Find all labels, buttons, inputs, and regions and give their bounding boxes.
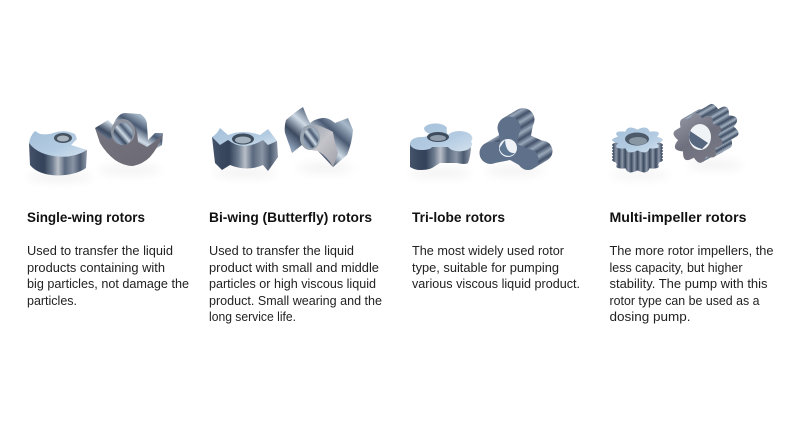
text block: single-wing description: products containing with [27, 261, 165, 275]
text block: bi-wing description [209, 244, 382, 324]
text block: bi-wing description: long service life. [209, 310, 296, 324]
icon: multi-impeller rotors [610, 100, 743, 179]
text block: single-wing description [27, 244, 189, 308]
icon: tri-lobe rotors [408, 108, 552, 178]
heading: bi-wing rotors: Bi-wing (Butterfly) rotors [209, 209, 372, 225]
heading: tri-lobe rotors: Tri-lobe rotors [412, 209, 505, 225]
text block: multi-impeller description: The more rotor impellers, the [610, 244, 774, 258]
icon: bi-wing butterfly rotors [212, 107, 353, 178]
text block: single-wing description: big particles, not damage the [27, 277, 189, 291]
text block: bi-wing description: product with small and middle [209, 261, 379, 275]
text block: multi-impeller description [610, 244, 774, 324]
text block: multi-impeller description: dosing pump. [610, 310, 690, 324]
text block: multi-impeller description: rotor type can be used as a [610, 294, 760, 308]
text block: multi-impeller description: less capacity, but higher [610, 261, 742, 275]
text block: bi-wing description: product. Small wearing and the [209, 294, 382, 308]
text block: single-wing description: particles. [27, 294, 77, 308]
text block: bi-wing description: particles or high viscous liquid [209, 277, 376, 291]
icon: single-wing rotors [26, 113, 163, 182]
text block: bi-wing description: Used to transfer the liquid [209, 244, 354, 258]
text block: tri-lobe description [412, 244, 580, 291]
heading: single-wing rotors: Single-wing rotors [27, 209, 145, 225]
heading: multi-impeller rotors: Multi-impeller rotors [610, 209, 747, 225]
text block: single-wing description: Used to transfer the liquid [27, 244, 173, 258]
text block: tri-lobe description: various viscous liquid product. [412, 277, 580, 291]
text block: tri-lobe description: type, suitable for pumping [412, 261, 559, 275]
text block: tri-lobe description: The most widely used rotor [412, 244, 564, 258]
text block: multi-impeller description: stability. The pump with this [610, 277, 768, 291]
